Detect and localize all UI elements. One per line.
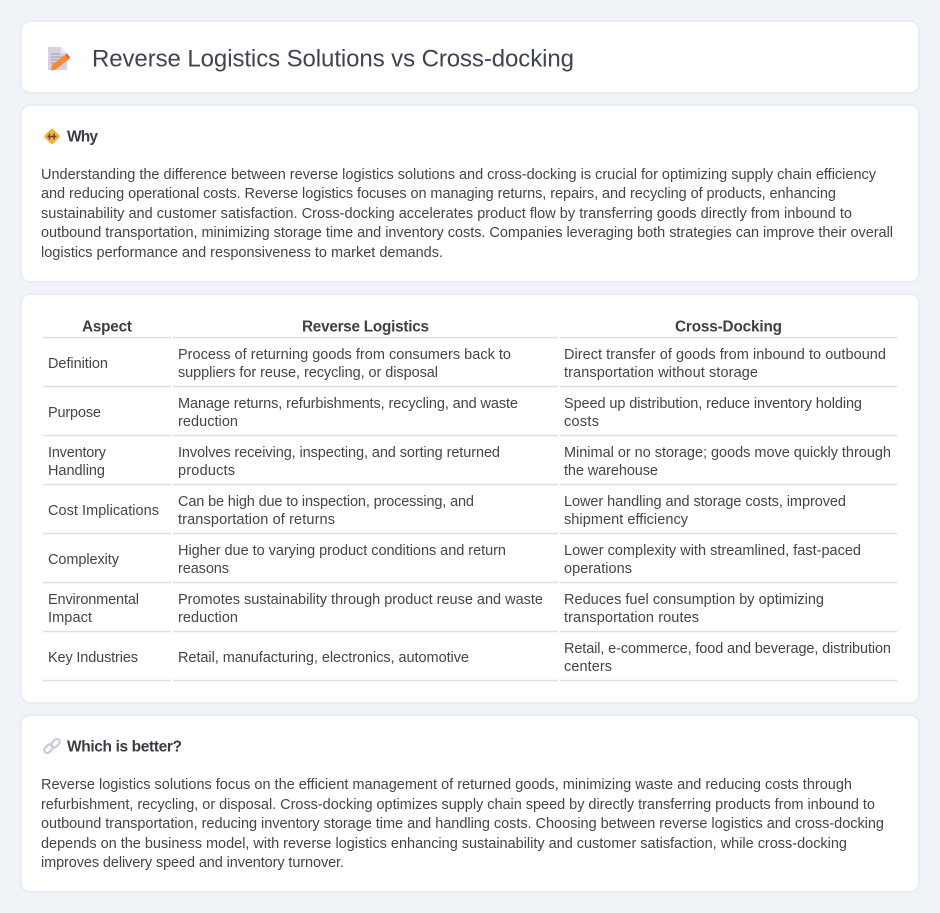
row: inventory handling: Handling: [48, 463, 105, 479]
panel: which is better: [20, 714, 920, 893]
row: key industries: [48, 641, 891, 675]
row: complexity: operations: [564, 561, 632, 577]
table header row: [82, 318, 782, 336]
row: inventory handling: the warehouse: [564, 463, 658, 479]
row: purpose: reduction: [178, 414, 238, 430]
row: definition: Definition: [48, 356, 108, 372]
text block: which is better paragraph: improves delivery speed and inventory turnover.: [41, 855, 344, 871]
row: complexity: [48, 543, 861, 577]
heading: why: Why: [67, 128, 98, 146]
text block: why paragraph: Understanding the difference between reverse logistics solutions and cross-docking is crucial for optimizing supply chain efficiency: [41, 167, 877, 183]
row: purpose: Speed up distribution, reduce inventory holding: [564, 396, 862, 412]
row: definition: Process of returning goods from consumers back to: [178, 347, 511, 363]
row: key industries: Key Industries: [48, 650, 138, 666]
row: inventory handling: Minimal or no storage; goods move quickly through: [564, 445, 891, 461]
row: environmental impact: reduction: [178, 610, 238, 626]
text block: which is better paragraph: outbound transportation, reducing inventory storage time and handling costs. Choosing between reverse logistics and cross-docking: [41, 816, 884, 832]
row: key industries: Retail, e-commerce, food and beverage, distribution: [564, 641, 891, 657]
row: definition: [48, 347, 886, 381]
row: environmental impact: Impact: [48, 610, 92, 626]
row: purpose: costs: [564, 414, 599, 430]
row: environmental impact: transportation routes: [564, 610, 699, 626]
row: cost implications: shipment efficiency: [564, 512, 689, 528]
row: key industries: Retail, manufacturing, electronics, automotive: [178, 650, 469, 666]
panel: comparison table: [20, 293, 920, 704]
icon: memo with pencil: [48, 47, 70, 70]
row: cost implications: [48, 494, 846, 528]
row: definition: transportation without storage: [564, 365, 758, 381]
row: environmental impact: Environmental: [48, 592, 139, 608]
text block: which is better paragraph: [41, 777, 884, 871]
table header row: Reverse Logistics: [302, 318, 429, 336]
text block: which is better paragraph: Reverse logistics solutions focus on the efficient management of returned goods, minimizing waste and reducing costs through: [41, 777, 852, 793]
row: cost implications: Can be high due to inspection, processing, and: [178, 494, 474, 510]
row: complexity: Complexity: [48, 552, 120, 568]
row: purpose: Purpose: [48, 405, 101, 421]
heading: which is better: Which is better?: [67, 738, 182, 756]
row: cost implications: transportation of returns: [178, 512, 335, 528]
row: definition: suppliers for reuse, recycling, or disposal: [178, 365, 438, 381]
text block: why paragraph: logistics performance and responsiveness to market demands.: [41, 245, 443, 261]
text block: why paragraph: sustainability and customer satisfaction. Cross-docking accelerates product flow by transferring goods directly from inbound to: [41, 206, 852, 222]
row: inventory handling: [48, 445, 891, 479]
row: complexity: Lower complexity with streamlined, fast-paced: [564, 543, 861, 559]
icon: construction diamond: [44, 128, 60, 145]
text block: why paragraph: outbound transportation, minimizing storage time and inventory costs. Companies leveraging both strategies can improve their overall: [41, 225, 893, 241]
row: complexity: Higher due to varying product conditions and return: [178, 543, 506, 559]
row: key industries: centers: [564, 659, 612, 675]
table header row: Cross-Docking: [675, 318, 782, 336]
row: cost implications: Lower handling and storage costs, improved: [564, 494, 846, 510]
text block: which is better paragraph: depends on the business model, with reverse logistics enhancing sustainability and customer satisfaction, while cross-docking: [41, 836, 847, 852]
panel: header: [20, 20, 920, 94]
text block: why paragraph: and reducing operational costs. Reverse logistics focuses on managing returns, repairs, and recycling of products, enhancing: [41, 186, 836, 202]
row: environmental impact: [48, 592, 824, 626]
row: complexity: reasons: [178, 561, 229, 577]
row: inventory handling: products: [178, 463, 235, 479]
icon: link: [43, 738, 61, 754]
text block: why paragraph: [41, 167, 893, 261]
row: environmental impact: Reduces fuel consumption by optimizing: [564, 592, 824, 608]
title: Reverse Logistics Solutions vs Cross-docking: [92, 46, 574, 72]
panel: why: [20, 104, 920, 283]
row: inventory handling: Inventory: [48, 445, 107, 461]
row: definition: Direct transfer of goods from inbound to outbound: [564, 347, 886, 363]
row: purpose: [48, 396, 862, 430]
row: cost implications: Cost Implications: [48, 503, 159, 519]
row: environmental impact: Promotes sustainability through product reuse and waste: [178, 592, 543, 608]
text block: which is better paragraph: refurbishment, recycling, or disposal. Cross-docking optimizes supply chain speed by directly transferring products from inbound to: [41, 797, 875, 813]
row: inventory handling: Involves receiving, inspecting, and sorting returned: [178, 445, 500, 461]
row: purpose: Manage returns, refurbishments, recycling, and waste: [178, 396, 518, 412]
table header row: Aspect: [82, 318, 132, 336]
